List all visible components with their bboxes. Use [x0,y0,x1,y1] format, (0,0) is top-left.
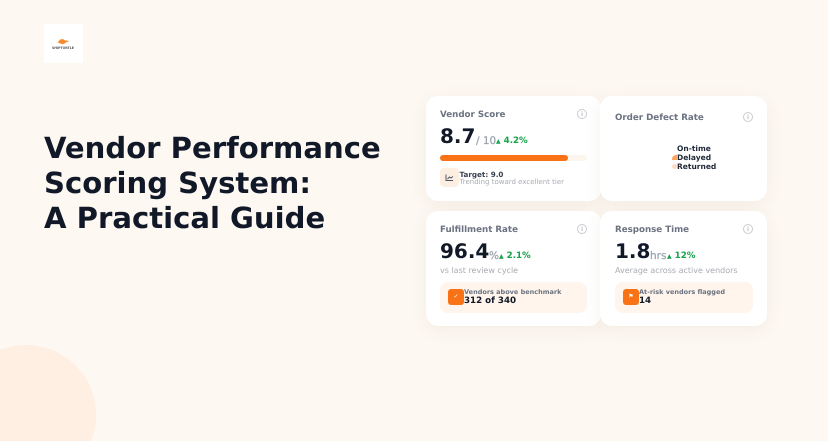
icon: check [448,289,464,305]
target row [440,168,564,187]
progress fill [440,155,568,161]
callout: at-risk vendors [615,282,753,313]
icon: info [577,224,587,234]
target label: Target: 9.0 [460,170,503,179]
legend: delayed swatch [672,154,677,160]
heading: Response Time [615,225,689,235]
icon: flag: ⚑ [628,293,634,300]
icon: turtle logo mark [58,39,70,44]
title [44,131,381,235]
legend: returned: Returned [677,162,716,170]
icon: info [743,224,753,234]
icon: info: i [581,110,583,118]
panel: order defect rate [600,96,767,201]
callout value: 312 of 340 [464,296,516,306]
icon: info: i [747,225,749,233]
time unit: hrs [650,250,666,262]
title: Vendor Performance [44,131,381,165]
title: A Practical Guide [44,201,325,235]
trend: ▲ 12% [667,251,695,261]
logo wordmark: SHIPTURTLE [52,46,74,50]
icon: check: ✓ [453,293,459,300]
panel: fulfillment rate [426,211,601,326]
target note: Trending toward excellent tier [460,178,564,186]
heading: Order Defect Rate [615,113,704,123]
icon: info: i [747,113,749,121]
trend: ▲ 2.1% [499,251,531,261]
heading: Vendor Score [440,110,505,120]
heading: Fulfillment Rate [440,225,518,235]
comparison note: vs last review cycle [440,266,518,275]
time value: 1.8 [615,239,650,263]
note: Average across active vendors [615,266,738,275]
legend [672,144,716,170]
logo [44,24,83,63]
legend: delayed: Delayed [677,152,711,162]
icon: chart [440,168,459,187]
rate unit: % [489,250,499,262]
title: Scoring System: [44,166,311,200]
callout value: 14 [639,296,651,306]
legend: on-time: On-time [677,144,711,152]
callout label: Vendors above benchmark [464,288,561,296]
progress bar [440,155,587,161]
icon: info [743,112,753,122]
panel: response time [600,211,767,326]
trend: ▲ 4.2% [496,136,528,146]
callout: vendors above benchmark [440,282,587,313]
icon: flag [623,289,639,305]
icon: info: i [581,225,583,233]
score value: 8.7 [440,124,475,148]
score unit: / 10 [476,134,496,146]
callout label: At-risk vendors flagged [639,288,725,296]
panel: vendor score [426,96,601,201]
rate value: 96.4 [440,239,489,263]
decorative circle [0,345,96,441]
icon: info [577,109,587,119]
legend: returned swatch [672,164,677,168]
